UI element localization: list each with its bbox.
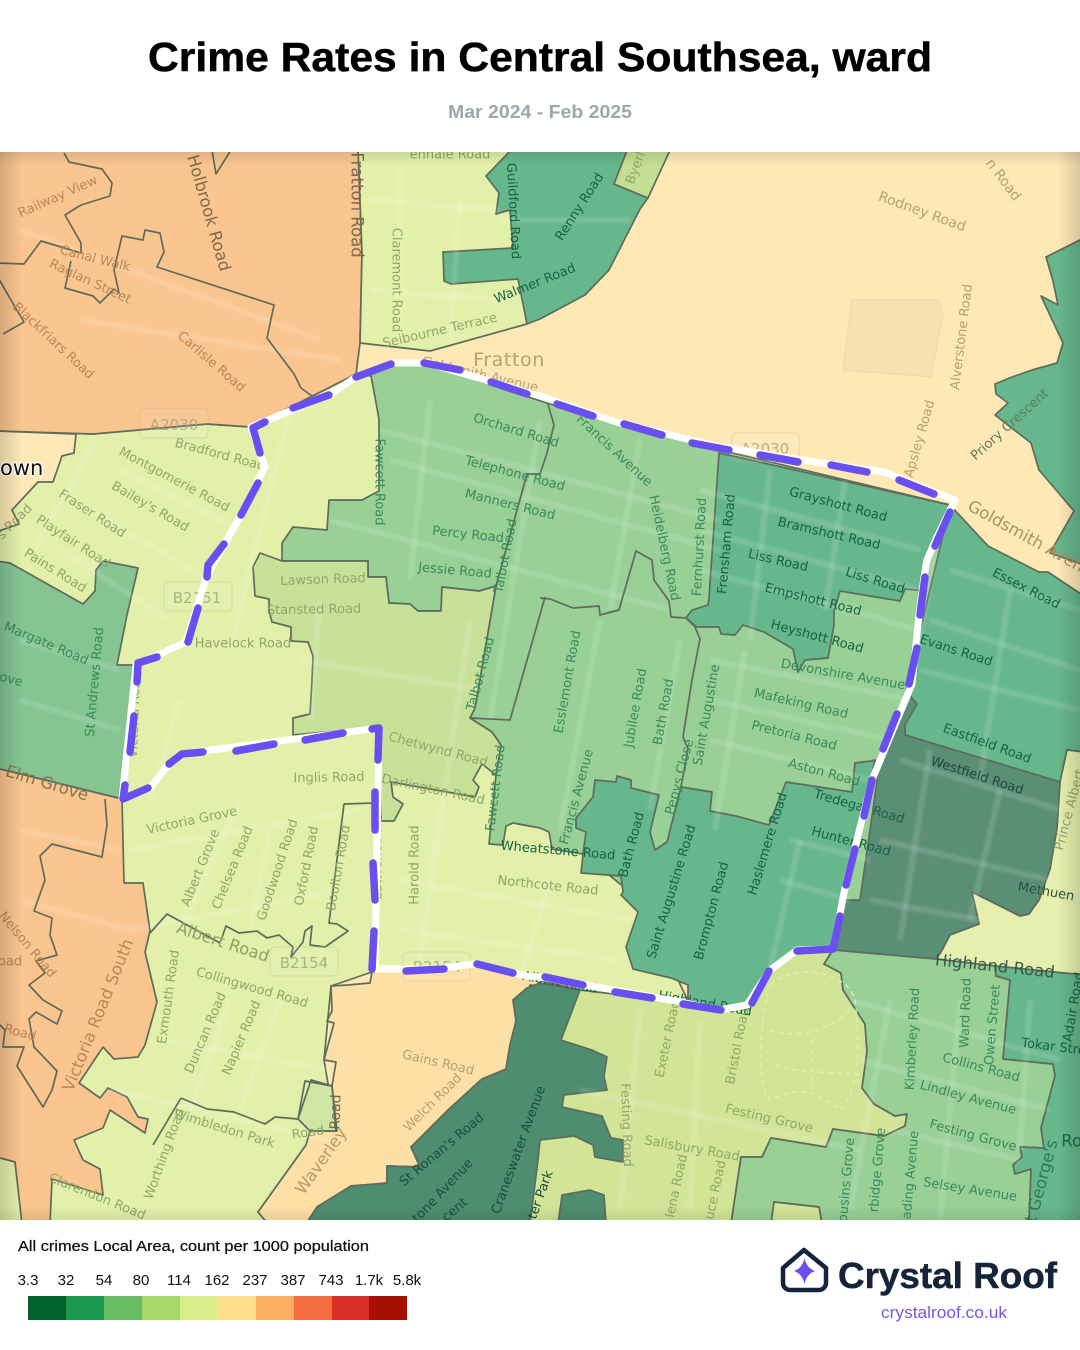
legend scale labels: 387 xyxy=(280,1272,306,1289)
street name labels: Margate Road xyxy=(1,619,91,669)
park paths xyxy=(761,972,860,1110)
street name labels: Gains Road xyxy=(401,1047,475,1079)
street name labels: Lawson Road xyxy=(280,571,366,589)
street grid xyxy=(20,170,1080,1220)
street name labels: Oxford Road xyxy=(292,825,322,907)
street name labels: Havelock Road xyxy=(195,636,291,652)
street name labels: Fratton xyxy=(473,349,545,371)
legend title: All crimes Local Area, count per 1000 population xyxy=(18,1239,369,1255)
street name labels: Bradford Road xyxy=(173,436,267,474)
street name labels: Manners Road xyxy=(463,487,557,523)
street name labels: Guildford Road xyxy=(503,162,523,260)
street name labels: Harold Road xyxy=(408,825,422,905)
ward boundary: purple dashes xyxy=(123,363,950,1010)
street name labels: Stansted Road xyxy=(267,602,361,618)
street name labels: Eastfield Road xyxy=(941,721,1033,767)
ward and neighbourhood boundaries xyxy=(0,150,700,1145)
street name labels: Bristol Road xyxy=(723,1006,753,1086)
street name labels: Mafeking Road xyxy=(752,686,850,722)
street name labels: Festing Road xyxy=(617,1083,635,1167)
street name labels: Fawcett Road xyxy=(483,744,509,832)
street name labels: Playfair Road xyxy=(33,512,113,572)
street name labels: Renny Road xyxy=(553,170,607,244)
street name labels: uce Road xyxy=(702,1159,730,1221)
street name labels: Alverstone Road xyxy=(948,283,976,391)
street name labels: Empshott Road xyxy=(763,581,863,619)
street name labels: Holbrook Road xyxy=(183,153,235,273)
street name labels: Pains Road xyxy=(21,546,89,596)
map edge vignette xyxy=(0,152,1080,1220)
road shields: A2030 xyxy=(741,440,789,458)
street name labels: Westfield Road xyxy=(929,754,1025,798)
street name labels: Walmer Road xyxy=(492,261,578,307)
road shields: B2151 xyxy=(173,589,221,607)
street name labels: n Road xyxy=(982,156,1024,204)
street name labels: Exeter Road xyxy=(652,999,684,1079)
place label: Town: own xyxy=(0,456,43,480)
street name labels: Talbot Road xyxy=(491,518,521,595)
legend scale labels: 114 xyxy=(167,1272,191,1289)
street name labels: Wimbledon Park xyxy=(171,1106,277,1152)
street name labels: rbidge Grove xyxy=(867,1127,889,1213)
street name labels: Festing Grove xyxy=(928,1117,1018,1155)
legend scale labels: 237 xyxy=(242,1272,268,1289)
street name labels: Wheatstone Road xyxy=(500,839,616,863)
street name labels: Elm Grove xyxy=(3,761,91,805)
street name labels: Chelsea Road xyxy=(209,824,257,912)
street name labels: Road xyxy=(291,1123,325,1143)
street name labels: Road xyxy=(327,1094,345,1130)
street name labels: Collins Road xyxy=(941,1050,1021,1086)
legend scale labels: 3.3 xyxy=(18,1272,38,1289)
street name labels: Frensham Road xyxy=(715,493,739,595)
choropleth regions xyxy=(0,148,1080,1224)
street name labels: lena Road xyxy=(663,1153,691,1219)
street name labels: Francis Avenue xyxy=(557,748,597,846)
street name labels: Fernhurst Road xyxy=(690,497,710,597)
ward boundary: white base line xyxy=(122,363,955,1010)
legend scale labels: 1.7k xyxy=(355,1272,384,1289)
legend scale labels: 32 xyxy=(58,1272,74,1289)
street name labels: Hunter Road xyxy=(810,824,892,860)
street name labels: Heyshott Road xyxy=(769,617,865,657)
street name labels: Goldsmith Avenue xyxy=(420,354,540,396)
street name labels: Blackfriars Road xyxy=(9,300,97,382)
street name labels: Jubilee Road xyxy=(621,667,650,750)
street name labels: Road xyxy=(2,1022,38,1044)
street name labels: Albert Road xyxy=(174,918,272,966)
street name labels: ter Park xyxy=(525,1168,557,1221)
street name labels: Worthing Road xyxy=(142,1107,188,1201)
street name labels: Pretoria Road xyxy=(750,718,838,754)
street name labels: Seibourne Terrace xyxy=(381,311,499,351)
road shields: B2154 xyxy=(413,958,461,976)
street name labels: Rodney Road xyxy=(876,189,968,235)
street name labels: St George's xyxy=(1018,1137,1062,1235)
street name labels: Highland Road xyxy=(657,988,753,1020)
street name labels: Albert Grove xyxy=(179,827,223,909)
street name labels: Owen Street xyxy=(982,984,1004,1066)
street name labels: Jessie Road xyxy=(417,560,492,582)
street name labels: Priory Crescent xyxy=(968,386,1052,464)
street name labels: Carlisle Road xyxy=(174,329,248,395)
street name labels: Heidelberg Road xyxy=(645,494,683,602)
street name labels: Brompton Road xyxy=(692,860,732,962)
street name labels: Bath Road xyxy=(651,678,677,746)
street name labels: Saint Augustine Road xyxy=(644,823,700,961)
street name labels: Railway View xyxy=(16,173,100,221)
road shields: B2154 xyxy=(280,954,328,972)
street name labels: Kimberley Road xyxy=(903,987,923,1091)
street name labels: Clarendon Road xyxy=(46,1171,148,1223)
street name labels: Liss Road xyxy=(747,547,809,575)
street name labels: Ward Road xyxy=(957,978,975,1048)
street name labels: St Ronan's Road xyxy=(397,1110,487,1190)
legend scale labels: 162 xyxy=(204,1272,230,1289)
subtitle: date range: Mar 2024 - Feb 2025 xyxy=(448,102,632,122)
street name labels: Montgomerie Road xyxy=(116,444,232,516)
street name labels: Inglis Road xyxy=(293,770,365,786)
street name labels: Lawrence Road xyxy=(370,800,386,900)
street name labels: Craneswater Avenue xyxy=(489,1084,549,1216)
street name labels: Bath Road xyxy=(616,811,648,879)
street name labels: Northcote Road xyxy=(497,873,599,899)
street name labels: Haslemere Road xyxy=(745,791,791,897)
logo icon: house with star xyxy=(783,1250,826,1290)
street name labels: Orchard Road xyxy=(471,411,561,451)
street name labels: Grayshott Road xyxy=(787,485,889,525)
street name labels: St Andrews Road xyxy=(83,627,107,737)
street name labels: Albert Road xyxy=(521,969,599,997)
title: Crime Rates in Central Southsea, ward xyxy=(148,34,932,80)
street name labels: Evans Road xyxy=(918,632,994,670)
street name labels: Percy Road xyxy=(431,524,505,546)
street name labels: Bramshott Road xyxy=(776,515,882,553)
road shields xyxy=(140,409,799,981)
street name labels: Selsey Avenue xyxy=(922,1175,1018,1205)
street name labels: Pepys Close xyxy=(663,738,697,816)
legend scale labels: 5.8k xyxy=(393,1272,422,1289)
street name labels: Talbot Road xyxy=(464,636,498,713)
legend scale labels xyxy=(18,1272,422,1289)
stadium footprint xyxy=(843,300,943,377)
street name labels: Duncan Road xyxy=(182,990,230,1076)
street name labels: Francis Avenue xyxy=(573,412,655,490)
street name labels: ousins Grove xyxy=(836,1137,858,1223)
street name labels: Exmouth Road xyxy=(155,949,183,1045)
street name labels: tone Avenue xyxy=(410,1156,476,1226)
street name labels: Victoria Road South xyxy=(59,936,137,1094)
legend colour bar xyxy=(28,1296,407,1320)
street name labels: Raglan Street xyxy=(47,257,133,307)
legend scale labels: 54 xyxy=(96,1272,112,1289)
street name labels: Victoria Road xyxy=(126,672,144,758)
road shields: A2030 xyxy=(150,416,198,434)
street name labels: Lindley Avenue xyxy=(918,1078,1018,1118)
street name labels: Welch Road xyxy=(401,1071,465,1135)
street name labels: Methuen xyxy=(1017,880,1075,904)
street name labels: Fratton Road xyxy=(348,152,366,258)
logo wordmark: Crystal Roof xyxy=(838,1255,1058,1296)
street name labels: Victoria Grove xyxy=(145,804,239,838)
street name labels: Napier Road xyxy=(220,998,264,1078)
street name labels: cent xyxy=(439,1195,471,1225)
legend scale labels: 80 xyxy=(133,1272,149,1289)
legend scale labels: 743 xyxy=(318,1272,344,1289)
street name labels: Claremont Road xyxy=(388,228,404,332)
street name labels: Esslemont Road xyxy=(552,629,584,735)
street name labels: ennale Road xyxy=(410,148,490,162)
street name labels: Bailey's Road xyxy=(109,479,191,535)
street name labels: Festing Grove xyxy=(724,1102,814,1136)
street name labels: Telephone Road xyxy=(462,453,567,495)
street name labels: Highland Road xyxy=(934,950,1056,982)
street name labels: Goodwood Road xyxy=(255,817,301,923)
street name labels: Aston Road xyxy=(786,756,862,790)
street name labels: Fawcett Road xyxy=(372,439,386,525)
street name labels: Salisbury Road xyxy=(643,1133,741,1165)
website: crystalroof.co.uk xyxy=(881,1303,1008,1322)
street name labels: Canal Walk xyxy=(58,243,132,275)
street name labels: Darlington Road xyxy=(380,772,486,808)
street name labels: Essex Road xyxy=(990,566,1062,612)
street name labels: ading Avenue xyxy=(900,1130,922,1220)
street name labels: Boulton Road xyxy=(324,824,354,912)
street name labels: Saint Augustine xyxy=(691,663,723,767)
street name labels: Liss Road xyxy=(844,565,906,597)
street name labels: Devonshire Avenue xyxy=(780,657,906,693)
street name labels: Apsley Road xyxy=(902,398,938,480)
street name labels: Tredegar Road xyxy=(811,787,906,827)
street name labels: Collingwood Road xyxy=(194,965,310,1011)
street name labels: Byerl xyxy=(623,150,649,186)
street name labels: Chetwynd Road xyxy=(387,730,489,770)
street name labels: Fraser Road xyxy=(56,487,128,541)
street name labels: Waverley xyxy=(291,1124,351,1198)
